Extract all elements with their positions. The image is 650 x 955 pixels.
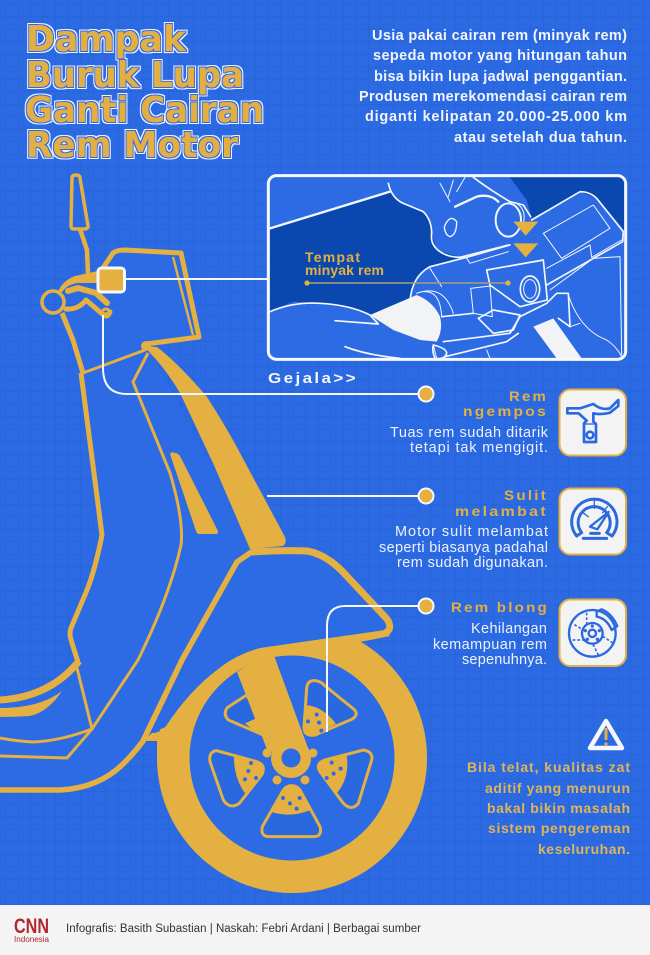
title: Rem Motor (26, 125, 238, 166)
title: Buruk Lupa (26, 55, 244, 96)
hub bolts (262, 748, 318, 784)
intro text block: atau setelah dua tahun. (454, 130, 627, 146)
heading: Gejala: Gejala>> (268, 371, 358, 387)
fender band (143, 630, 390, 758)
symptom: Sulit melambat: Sulit (504, 488, 548, 503)
icon: speedometer (560, 488, 626, 554)
connector dots (418, 386, 434, 614)
head cowl (83, 250, 199, 373)
warning text: aditif yang menurun (485, 780, 630, 796)
logo: CNN Indonesia: CNN (14, 915, 49, 938)
front wheel (157, 623, 427, 893)
front diagonal line (143, 551, 253, 741)
logo: CNN Indonesia (14, 915, 50, 944)
icon: brake disc (560, 600, 626, 666)
reservoir label: Tempat (305, 249, 360, 265)
symptom: Rem blong: kemampuan rem (433, 637, 547, 653)
brake disc segments (234, 705, 347, 815)
symptom: Sulit melambat: seperti biasanya padahal (379, 540, 548, 556)
fork (237, 650, 308, 752)
panel: brake fluid reservoir close-up (268, 176, 626, 359)
leg shield outline (70, 373, 102, 662)
warning text: sistem pengereman (488, 820, 630, 836)
panel background (268, 176, 626, 359)
warning text: keseluruhan. (538, 841, 630, 857)
hand and handlebar line art (270, 177, 623, 359)
brake reservoir marker (98, 268, 124, 292)
credits: Infografis: Basith Subastian | Naskah: Febri Ardani | Berbagai sumber (66, 923, 421, 935)
reservoir label: minyak rem (305, 262, 384, 278)
bright reflection (370, 295, 582, 358)
dark blue backdrop (270, 177, 624, 315)
intro text block (359, 28, 627, 146)
intro text block: Usia pakai cairan rem (minyak rem) (372, 28, 627, 44)
title: Dampak (26, 19, 187, 60)
symptom: Rem blong: Kehilangan (471, 621, 547, 637)
intro text block: diganti kelipatan 20.000-25.000 km (365, 109, 627, 125)
mirror (71, 175, 88, 229)
footer (0, 905, 650, 955)
small wedge (170, 452, 218, 534)
logo: CNN Indonesia: Indonesia (14, 935, 50, 944)
warning text: bakal bikin masalah (487, 800, 630, 816)
warning text: Bila telat, kualitas zat (467, 759, 630, 775)
symptom: Rem ngempos: Rem (509, 389, 548, 404)
reservoir label (304, 249, 511, 286)
rear body lines (0, 353, 253, 790)
icon: brake lever (560, 390, 626, 456)
front wedge (145, 346, 286, 549)
scooter body fill (0, 252, 253, 789)
symptom: Rem blong (433, 600, 549, 668)
connector lines (103, 279, 426, 732)
title: Ganti Cairan (25, 90, 264, 131)
symptom: Sulit melambat: Motor sulit melambat (395, 524, 548, 540)
symptom: Rem ngempos: tetapi tak mengigit. (410, 440, 548, 456)
fill level triangles (513, 222, 538, 257)
scooter illustration (0, 175, 427, 893)
hub (271, 738, 311, 778)
front fender line (253, 551, 390, 634)
disc holes (243, 713, 343, 811)
mirror stem (80, 229, 88, 274)
front fairing fill (152, 551, 392, 733)
handlebar and brake lever (42, 271, 110, 373)
panel border (268, 176, 626, 359)
title (25, 19, 264, 166)
symptom: Sulit melambat (379, 488, 548, 571)
intro text block: sepeda motor yang hitungan tahun (373, 48, 627, 64)
intro text block: Produsen merekomendasi cairan rem (359, 89, 627, 105)
symptom: Sulit melambat: melambat (455, 504, 548, 519)
symptom: Sulit melambat: rem sudah digunakan. (397, 555, 548, 571)
symptom: Rem ngempos (390, 389, 549, 456)
symptom: Rem ngempos: Tuas rem sudah ditarik (390, 425, 549, 441)
symptom: Rem ngempos: ngempos (463, 404, 548, 419)
warning icon (590, 721, 622, 748)
symptom: Rem blong: sepenuhnya. (462, 652, 547, 668)
symptom: Rem blong: Rem blong (451, 600, 549, 615)
wheel cutouts (210, 681, 372, 837)
intro text block: bisa bikin lupa jadwal penggantian. (374, 69, 627, 85)
warning text (467, 759, 630, 857)
